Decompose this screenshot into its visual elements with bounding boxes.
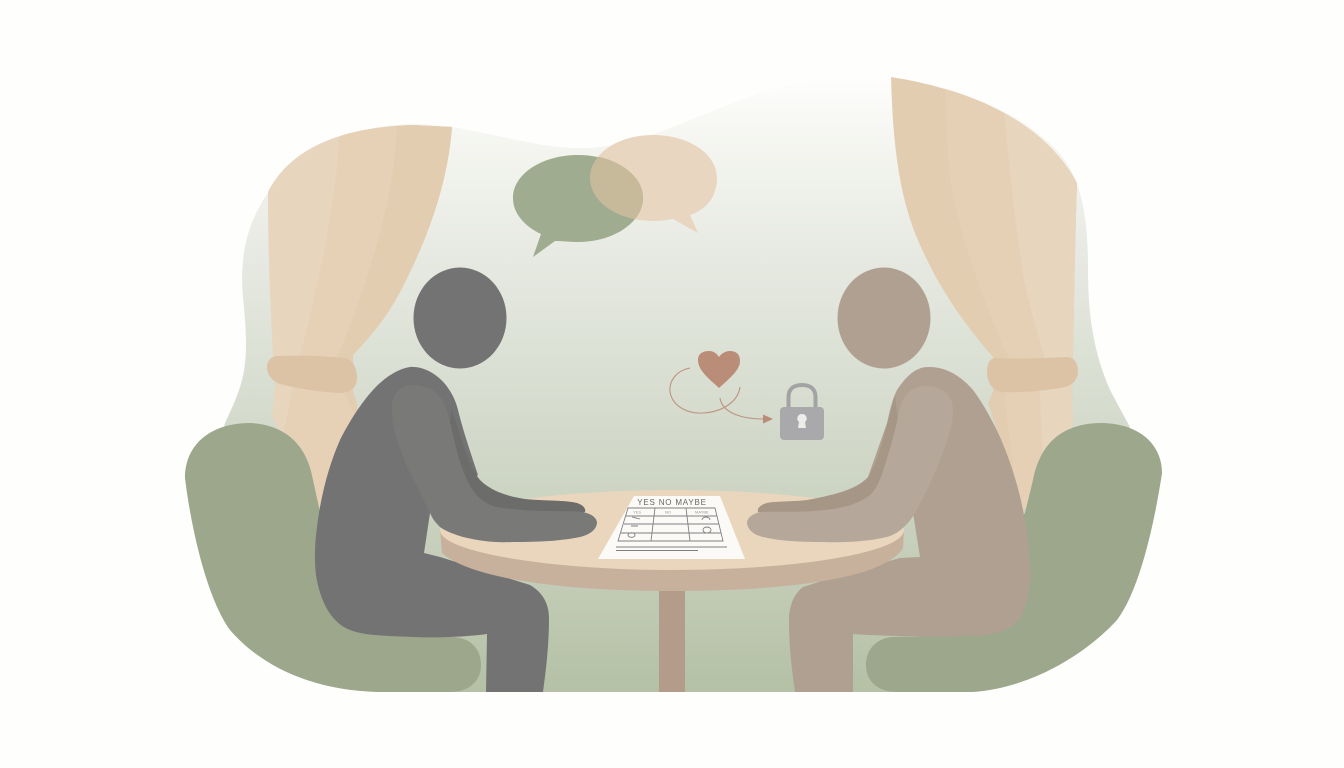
worksheet on table [598, 496, 745, 559]
speech bubbles [513, 135, 717, 257]
table top [440, 490, 904, 570]
background blob [200, 76, 1130, 692]
right person arm [747, 386, 953, 542]
left arm shadow [440, 410, 585, 520]
right arm [747, 386, 953, 542]
bubble overlap [590, 156, 643, 219]
right chair [866, 423, 1162, 692]
worksheet column labels [633, 510, 709, 514]
left person arm [392, 385, 597, 542]
worksheet grid [616, 508, 727, 550]
left chair [185, 423, 481, 692]
worksheet column labels: NO [665, 510, 671, 514]
icon: padlock [780, 385, 824, 440]
green speech bubble [513, 155, 643, 257]
right person body [789, 367, 1030, 692]
heads [414, 268, 930, 368]
right curtain [891, 77, 1078, 512]
left person body [315, 367, 549, 692]
right curtain tieback [987, 357, 1078, 392]
table edge [440, 530, 904, 591]
table [440, 490, 904, 692]
icon: heart [698, 351, 740, 388]
left person head [414, 268, 506, 368]
paper [598, 496, 745, 559]
left arm [392, 385, 597, 542]
left curtain tieback [267, 356, 357, 393]
arrow: loop from heart to lock [670, 368, 773, 424]
left curtain [267, 125, 452, 509]
table leg [659, 585, 685, 692]
worksheet column labels: YES [633, 510, 641, 514]
right person head [838, 268, 930, 368]
illustration: conversation at a table [184, 77, 1162, 692]
tan speech bubble [590, 135, 717, 233]
worksheet heading: YES NO MAYBE [637, 498, 707, 507]
right arm shadow [758, 395, 905, 520]
worksheet column labels: MAYBE [695, 510, 709, 514]
